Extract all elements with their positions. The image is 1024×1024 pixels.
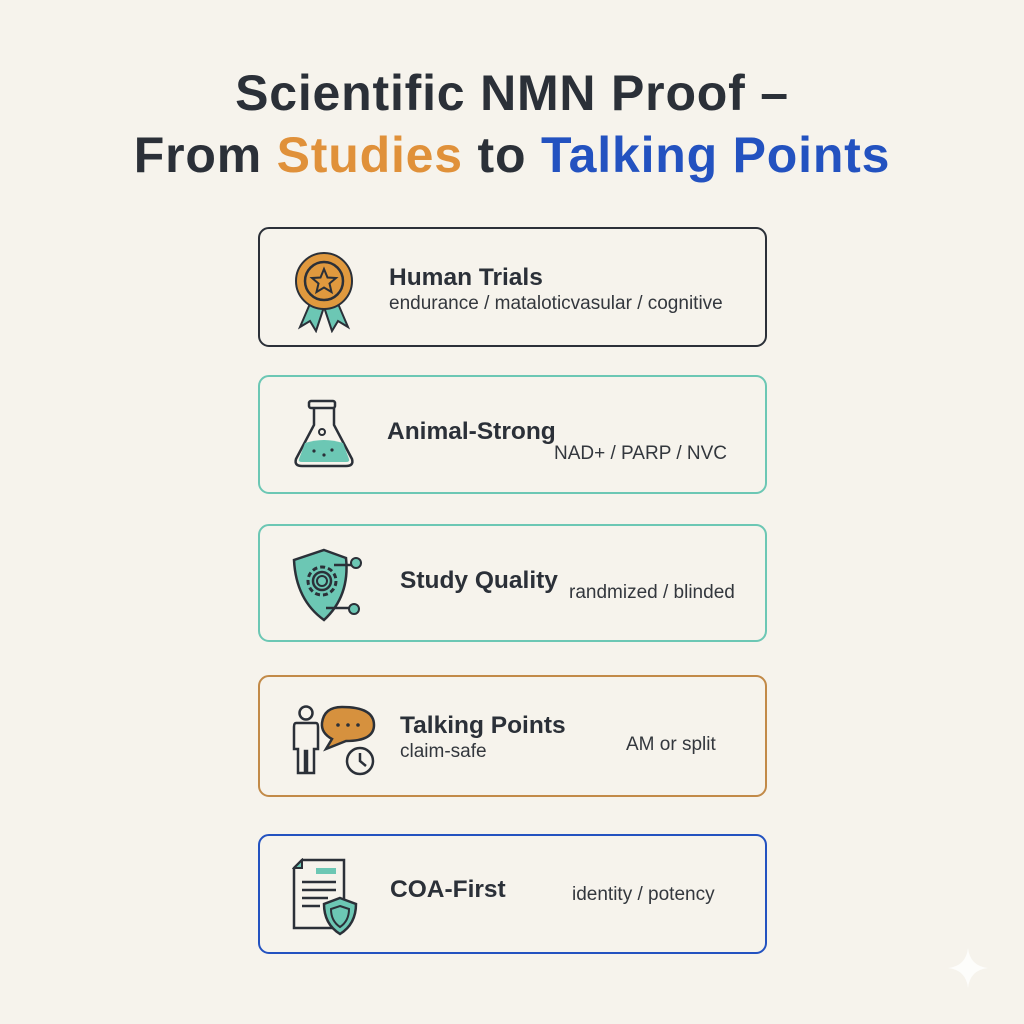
panel: human trials bbox=[258, 227, 767, 347]
text: From Studies to Talking Points bbox=[134, 127, 890, 183]
text: claim-safe bbox=[400, 741, 487, 762]
panel: coa bbox=[258, 834, 767, 954]
text: NAD+ / PARP / NVC bbox=[554, 443, 727, 464]
icon: document shield bbox=[292, 858, 358, 936]
icon: flask bbox=[294, 400, 354, 468]
icon: award badge bbox=[295, 252, 353, 333]
text: randmized / blinded bbox=[569, 582, 735, 603]
heading: Talking Points bbox=[400, 712, 566, 739]
panel: study quality bbox=[258, 524, 767, 642]
panel: animal bbox=[258, 375, 767, 494]
heading: Human Trials bbox=[389, 264, 543, 291]
title bbox=[134, 65, 890, 183]
text: identity / potency bbox=[572, 884, 715, 905]
icon: sparkle bbox=[950, 950, 986, 986]
heading: Animal-Strong bbox=[387, 418, 556, 445]
text: AM or split bbox=[626, 734, 716, 755]
heading: COA-First bbox=[390, 876, 506, 903]
text: Scientific NMN Proof – bbox=[235, 65, 789, 121]
icon: shield gear bbox=[292, 548, 362, 622]
panel: talking points bbox=[258, 675, 767, 797]
text: endurance / mataloticvasular / cognitive bbox=[389, 293, 723, 314]
icon: person speech clock bbox=[292, 705, 376, 776]
heading: Study Quality bbox=[400, 567, 558, 594]
